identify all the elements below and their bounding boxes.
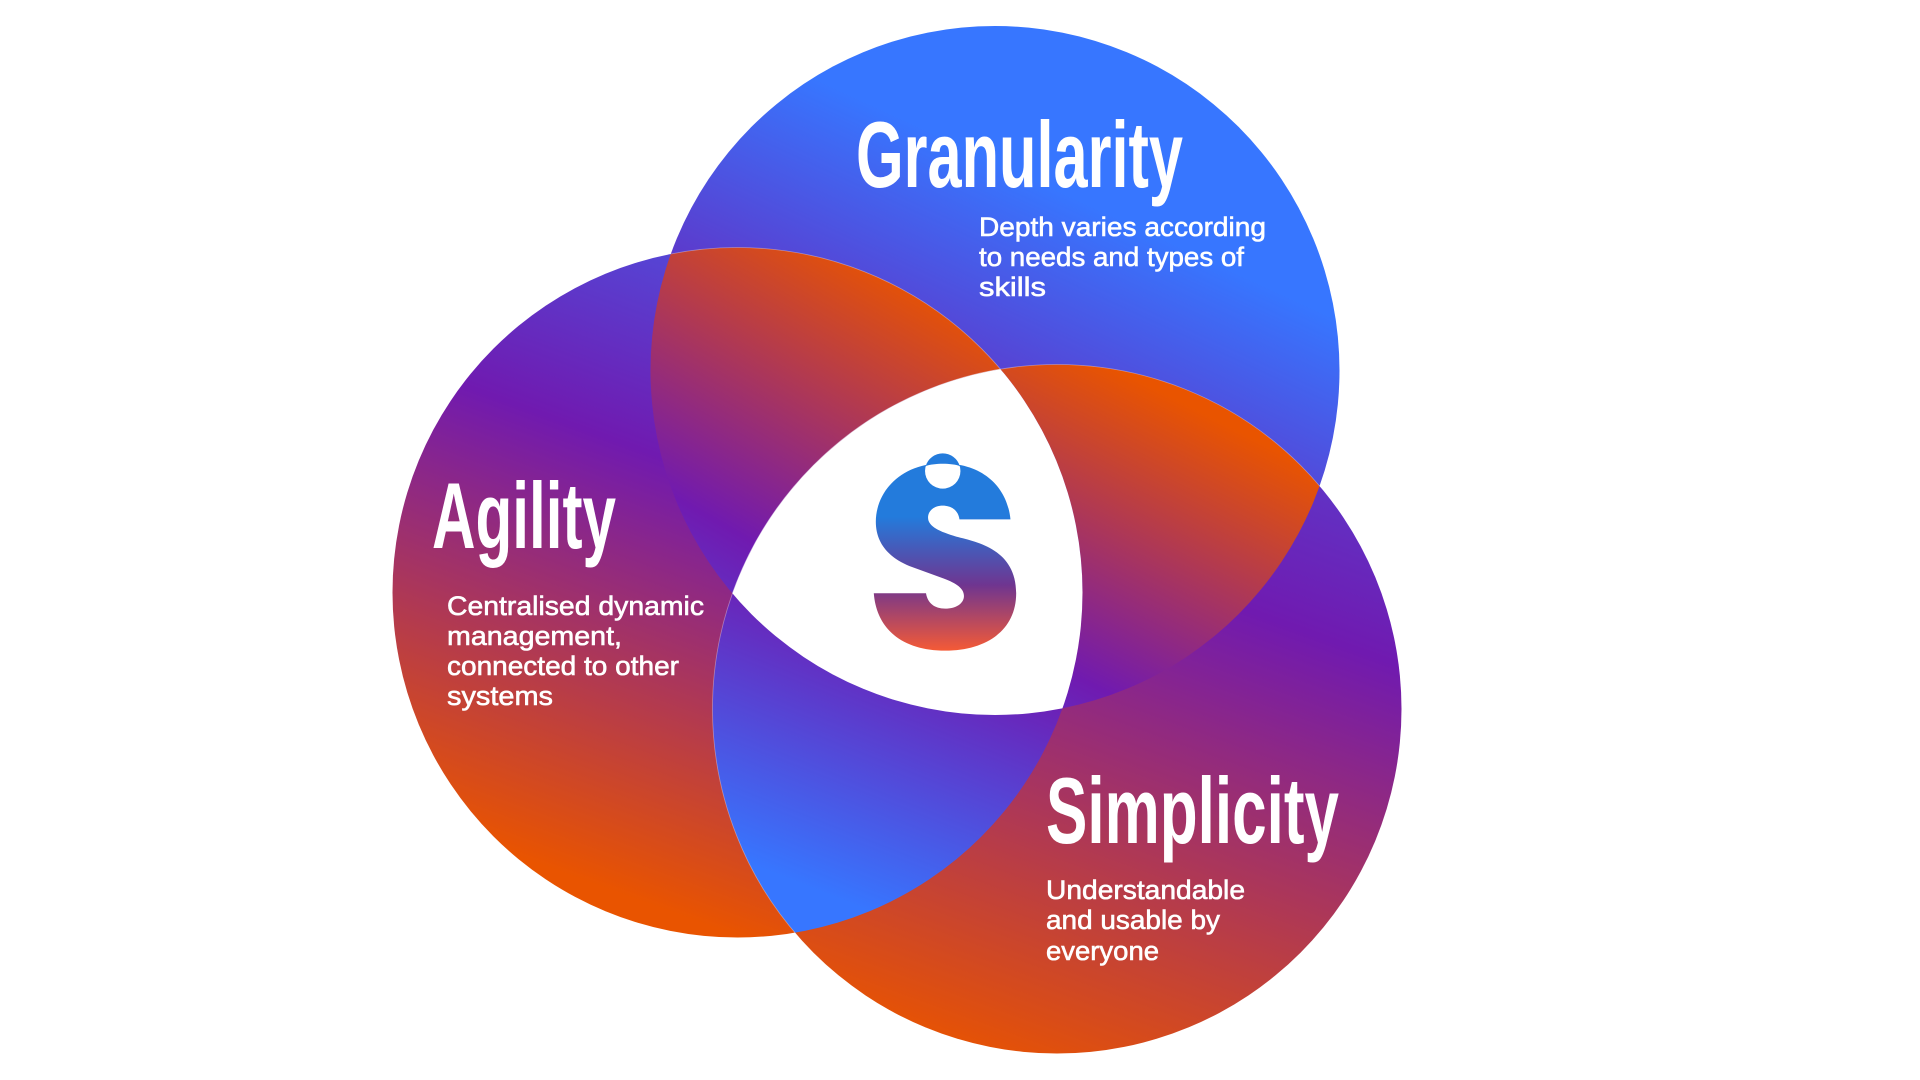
text: Agility description: systems <box>447 681 553 711</box>
text: Granularity description: skills <box>979 272 1046 302</box>
overlap: Agility and Simplicity <box>712 369 1082 932</box>
text: Simplicity description: Understandable <box>1046 875 1245 905</box>
text: Agility description: management, <box>447 621 622 651</box>
overlap: Granularity and Agility <box>650 247 1063 708</box>
text: Granularity description: to needs and types of <box>979 242 1245 272</box>
heading: Granularity: Granularity <box>856 102 1183 207</box>
centre: white triple overlap <box>732 369 1082 715</box>
overlap: Granularity and Simplicity <box>732 364 1320 708</box>
text: Simplicity description <box>1046 875 1245 966</box>
text: Simplicity description: everyone <box>1046 936 1159 966</box>
text: Granularity description: Depth varies according <box>979 212 1266 242</box>
circle: Agility <box>392 248 1082 938</box>
text: Granularity description <box>979 212 1266 302</box>
text: Agility description: connected to other <box>447 651 679 681</box>
circle: Simplicity <box>712 364 1402 1054</box>
text: Simplicity description: and usable by <box>1046 905 1221 935</box>
text: Agility description <box>447 591 704 711</box>
text: Agility description: Centralised dynamic <box>447 591 704 621</box>
logo: gradient letter S <box>874 453 1016 651</box>
circle: Granularity <box>650 26 1340 715</box>
heading: Agility: Agility <box>432 463 616 568</box>
heading: Simplicity: Simplicity <box>1046 758 1339 863</box>
